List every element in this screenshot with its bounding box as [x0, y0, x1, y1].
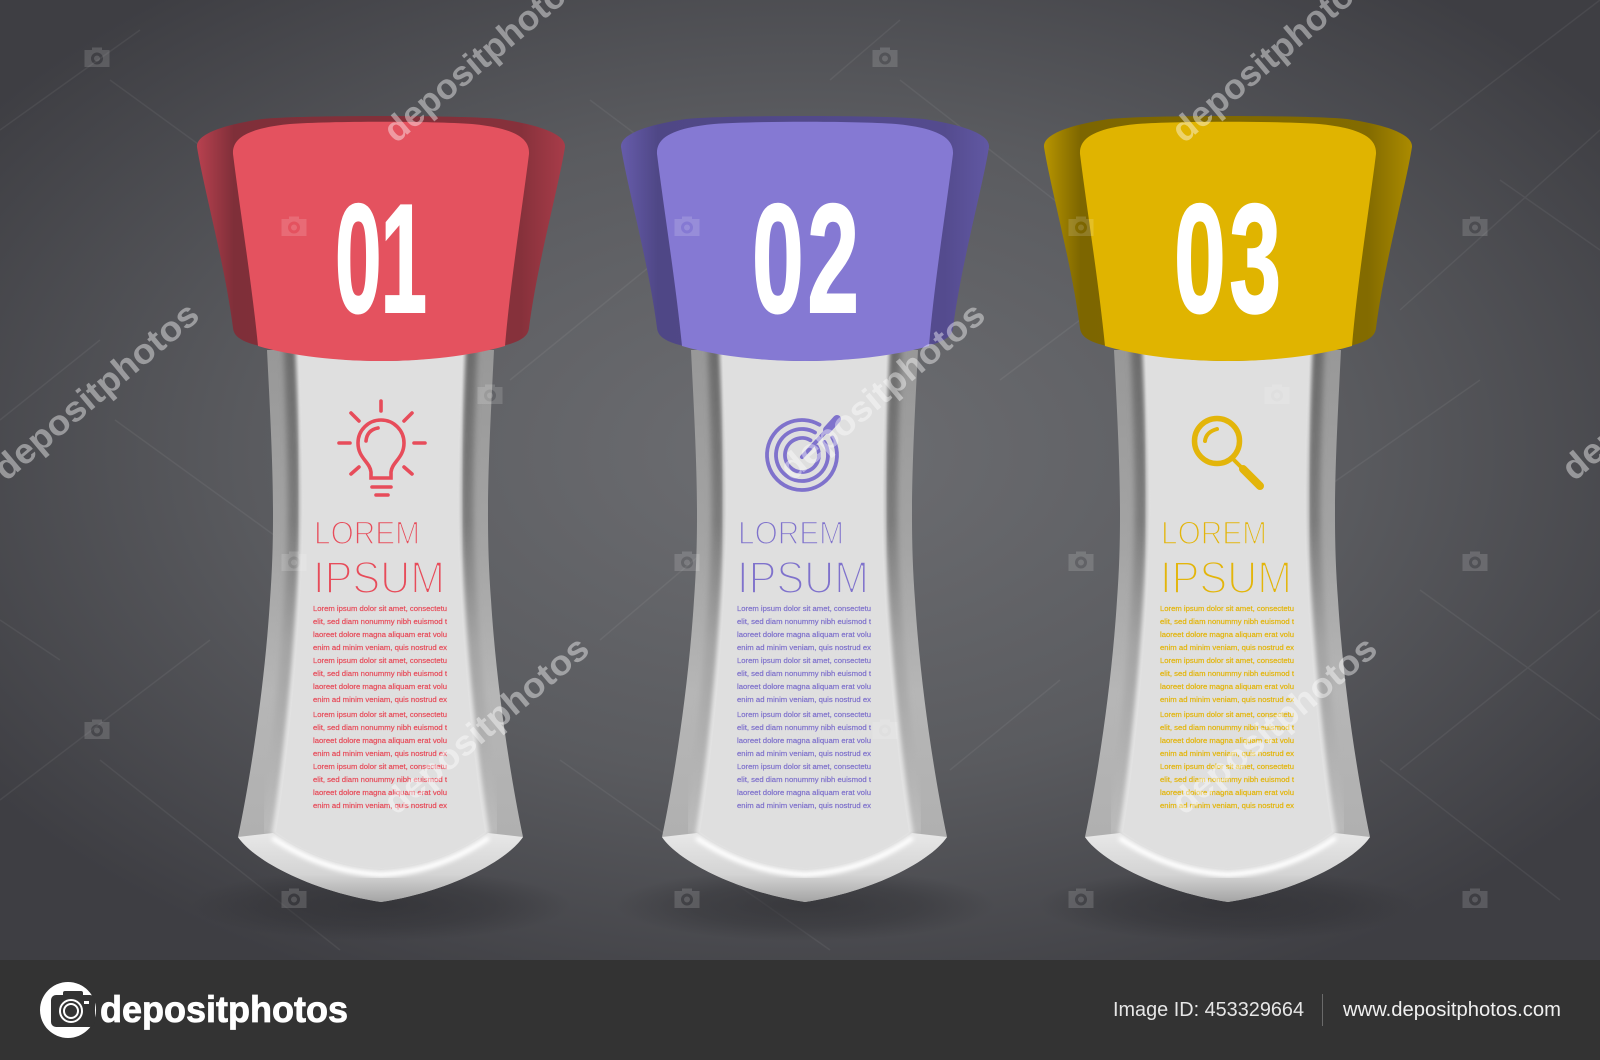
- body text 02: Lorem ipsum dolor sit amet, consectetu: [737, 710, 871, 719]
- watermark text: depositphotos: [376, 628, 596, 822]
- body text 02: laoreet dolore magna aliquam erat volu: [737, 630, 871, 639]
- heading 01: LOREM: [314, 515, 420, 551]
- footer logo icon: [40, 982, 96, 1038]
- heading 01: IPSUM: [313, 552, 445, 603]
- body text 01: elit, sed diam nonummy nibh euismod t: [313, 669, 448, 678]
- body text 01: laoreet dolore magna aliquam erat volu: [313, 788, 447, 797]
- body text 02: enim ad minim veniam, quis nostrud ex: [737, 643, 871, 652]
- icon: target with arrow: [767, 419, 837, 490]
- body text 01: Lorem ipsum dolor sit amet, consectetu: [313, 656, 447, 665]
- body text 03: laoreet dolore magna aliquam erat volu: [1160, 630, 1294, 639]
- panel: column 01: [197, 116, 565, 902]
- panel: column 03: [1044, 116, 1412, 902]
- body text 03: elit, sed diam nonummy nibh euismod t: [1160, 723, 1295, 732]
- body text 02: elit, sed diam nonummy nibh euismod t: [737, 775, 872, 784]
- number cap 02: [621, 116, 989, 361]
- heading 02: [737, 515, 869, 603]
- body text 01: Lorem ipsum dolor sit amet, consectetu: [313, 604, 447, 613]
- body text 02: [737, 604, 872, 810]
- body text 02: laoreet dolore magna aliquam erat volu: [737, 788, 871, 797]
- body text 02: Lorem ipsum dolor sit amet, consectetu: [737, 762, 871, 771]
- body text 03: enim ad minim veniam, quis nostrud ex: [1160, 643, 1294, 652]
- heading 02: LOREM: [738, 515, 844, 551]
- body text 03: enim ad minim veniam, quis nostrud ex: [1160, 801, 1294, 810]
- heading 03: [1160, 515, 1292, 603]
- heading 02: IPSUM: [737, 552, 869, 603]
- footer logo wordmark: depositphotos: [100, 989, 348, 1030]
- body text 03: elit, sed diam nonummy nibh euismod t: [1160, 669, 1295, 678]
- heading 01: [313, 515, 445, 603]
- watermark text: [0, 0, 1600, 822]
- body text 01: elit, sed diam nonummy nibh euismod t: [313, 617, 448, 626]
- body text 01: enim ad minim veniam, quis nostrud ex: [313, 749, 447, 758]
- number cap 03: [1044, 116, 1412, 361]
- body text 01: elit, sed diam nonummy nibh euismod t: [313, 723, 448, 732]
- body text 02: Lorem ipsum dolor sit amet, consectetu: [737, 604, 871, 613]
- body text 03: enim ad minim veniam, quis nostrud ex: [1160, 749, 1294, 758]
- footer bar: [0, 960, 1600, 1060]
- body text 01: laoreet dolore magna aliquam erat volu: [313, 630, 447, 639]
- body text 03: Lorem ipsum dolor sit amet, consectetu: [1160, 656, 1294, 665]
- icon: magnifying glass: [1194, 418, 1260, 486]
- heading 03: LOREM: [1161, 515, 1267, 551]
- body text 03: laoreet dolore magna aliquam erat volu: [1160, 682, 1294, 691]
- body text 02: enim ad minim veniam, quis nostrud ex: [737, 749, 871, 758]
- number 01: 01: [335, 173, 426, 346]
- body text 02: Lorem ipsum dolor sit amet, consectetu: [737, 656, 871, 665]
- body text 01: Lorem ipsum dolor sit amet, consectetu: [313, 762, 447, 771]
- body text 02: enim ad minim veniam, quis nostrud ex: [737, 801, 871, 810]
- body text 03: laoreet dolore magna aliquam erat volu: [1160, 788, 1294, 797]
- body text 01: laoreet dolore magna aliquam erat volu: [313, 682, 447, 691]
- watermark text: depositphotos: [772, 294, 992, 488]
- watermark camera icons: [84, 48, 1488, 908]
- body text 02: laoreet dolore magna aliquam erat volu: [737, 682, 871, 691]
- metal body 01: [238, 340, 523, 902]
- body text 01: Lorem ipsum dolor sit amet, consectetu: [313, 710, 447, 719]
- body text 03: laoreet dolore magna aliquam erat volu: [1160, 736, 1294, 745]
- body text 03: Lorem ipsum dolor sit amet, consectetu: [1160, 710, 1294, 719]
- body text 01: [313, 604, 448, 810]
- body text 02: elit, sed diam nonummy nibh euismod t: [737, 617, 872, 626]
- website url: www.depositphotos.com: [1342, 999, 1561, 1021]
- body text 03: Lorem ipsum dolor sit amet, consectetu: [1160, 604, 1294, 613]
- panel: column 02: [621, 116, 989, 902]
- number 03: 03: [1174, 173, 1285, 346]
- body text 02: enim ad minim veniam, quis nostrud ex: [737, 695, 871, 704]
- metal body 03: [1085, 340, 1370, 902]
- number 02: 02: [752, 173, 863, 346]
- heading 03: IPSUM: [1160, 552, 1292, 603]
- body text 03: Lorem ipsum dolor sit amet, consectetu: [1160, 762, 1294, 771]
- body text 03: elit, sed diam nonummy nibh euismod t: [1160, 617, 1295, 626]
- image id: Image ID: 453329664: [1113, 999, 1304, 1021]
- body text 01: elit, sed diam nonummy nibh euismod t: [313, 775, 448, 784]
- body text 02: elit, sed diam nonummy nibh euismod t: [737, 669, 872, 678]
- watermark text: depositphotos: [1164, 628, 1384, 822]
- body text 02: laoreet dolore magna aliquam erat volu: [737, 736, 871, 745]
- icon: light bulb: [339, 401, 425, 495]
- body text 01: enim ad minim veniam, quis nostrud ex: [313, 695, 447, 704]
- body text 01: enim ad minim veniam, quis nostrud ex: [313, 643, 447, 652]
- body text 03: enim ad minim veniam, quis nostrud ex: [1160, 695, 1294, 704]
- shadows under columns: [191, 869, 1418, 941]
- body text 01: laoreet dolore magna aliquam erat volu: [313, 736, 447, 745]
- body text 03: [1160, 604, 1295, 810]
- number cap 01: [197, 116, 565, 361]
- body text 01: enim ad minim veniam, quis nostrud ex: [313, 801, 447, 810]
- metal body 02: [662, 340, 947, 902]
- body text 03: elit, sed diam nonummy nibh euismod t: [1160, 775, 1295, 784]
- body text 02: elit, sed diam nonummy nibh euismod t: [737, 723, 872, 732]
